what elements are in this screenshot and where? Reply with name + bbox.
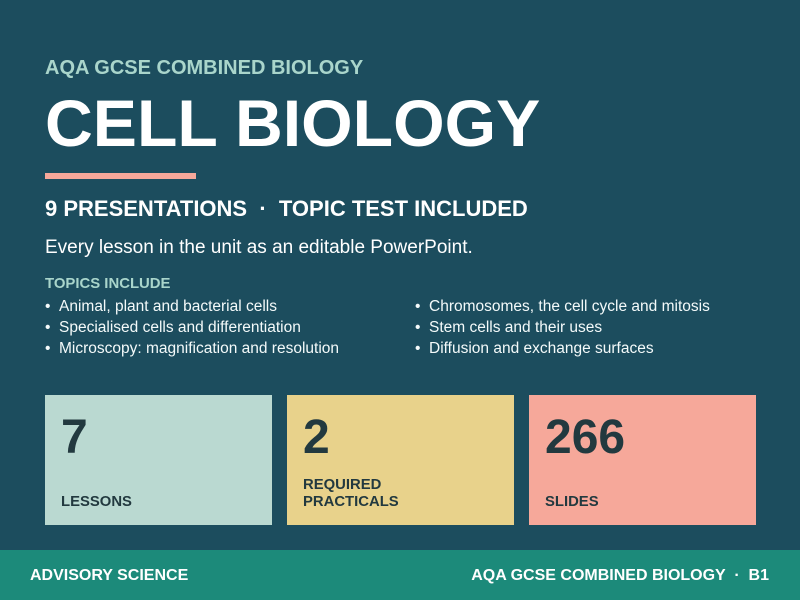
footer brand: ADVISORY SCIENCE	[30, 567, 188, 584]
accent bar	[45, 173, 196, 179]
stat card: lessons	[45, 395, 272, 525]
topics list: left column: Specialised cells and differentiation	[59, 319, 301, 336]
practicals number: 2	[303, 411, 330, 464]
topics list: right column: •	[415, 298, 420, 315]
topics heading: TOPICS INCLUDE	[45, 276, 170, 292]
topics list: left column	[45, 298, 339, 357]
slides label: SLIDES	[545, 494, 599, 510]
eyebrow heading: AQA GCSE COMBINED BIOLOGY	[45, 57, 363, 79]
stat card: required practicals	[287, 395, 514, 525]
title: CELL BIOLOGY	[45, 87, 540, 161]
topics list: right column: •	[415, 340, 420, 357]
topics list: left column: Microscopy: magnification and resolution	[59, 340, 339, 357]
topics list: right column: Chromosomes, the cell cycle and mitosis	[429, 298, 710, 315]
topics list: right column: Diffusion and exchange surfaces	[429, 340, 654, 357]
stat card: slides	[529, 395, 756, 525]
practicals label	[303, 477, 399, 510]
subtitle: 9 PRESENTATIONS · TOPIC TEST INCLUDED	[45, 196, 528, 221]
practicals label: REQUIRED	[303, 477, 381, 493]
topics list: left column: •	[45, 319, 50, 336]
footer band	[0, 550, 800, 600]
footer course code: AQA GCSE COMBINED BIOLOGY · B1	[471, 567, 769, 584]
description: Every lesson in the unit as an editable PowerPoint.	[45, 237, 473, 258]
practicals label: PRACTICALS	[303, 494, 399, 510]
slides number: 266	[545, 411, 625, 464]
topics list: right column	[415, 298, 710, 357]
topics list: left column: •	[45, 298, 50, 315]
topics list: left column: •	[45, 340, 50, 357]
topics list: left column: Animal, plant and bacterial cells	[59, 298, 277, 315]
topics list: right column: Stem cells and their uses	[429, 319, 602, 336]
lessons number: 7	[61, 411, 88, 464]
lessons label: LESSONS	[61, 494, 132, 510]
topics list: right column: •	[415, 319, 420, 336]
